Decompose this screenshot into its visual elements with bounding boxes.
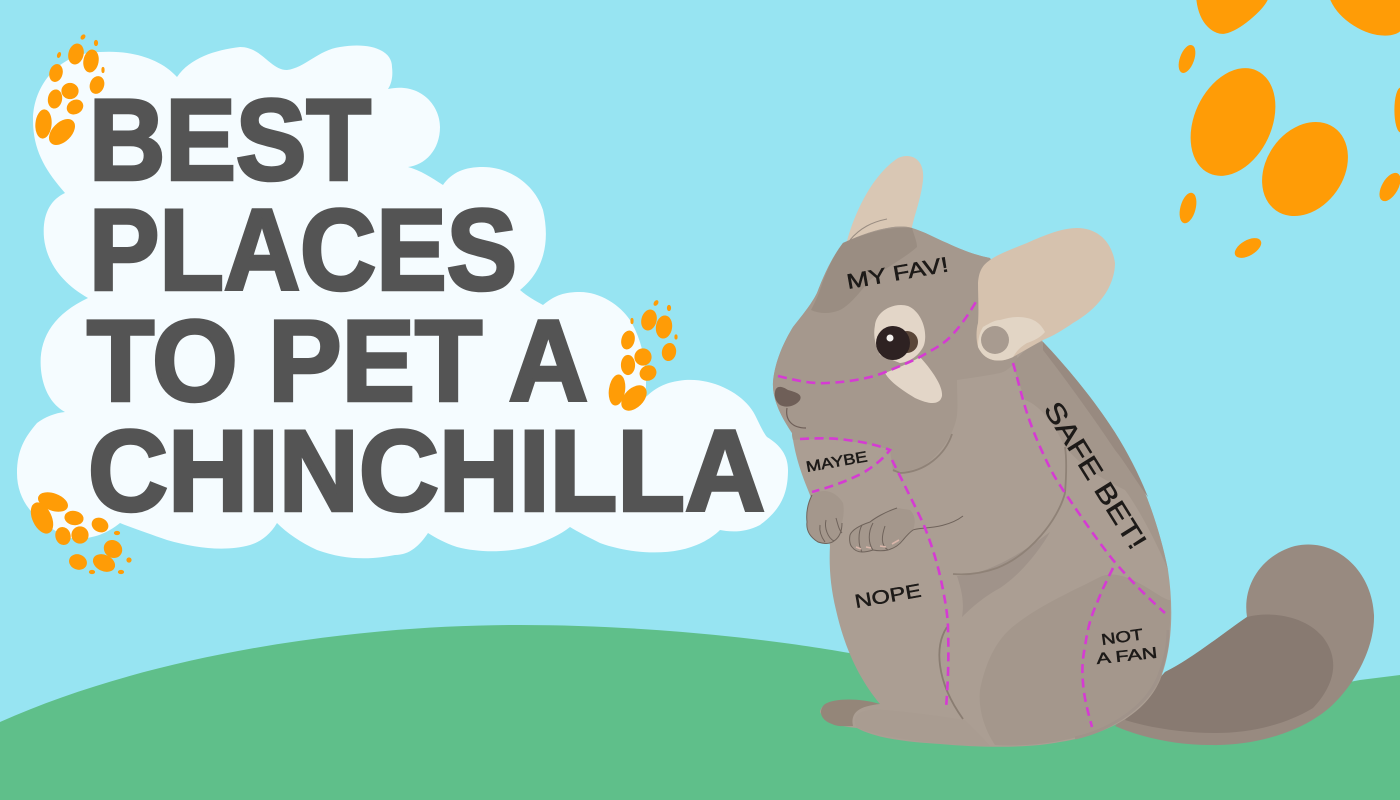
back edge rim <box>1043 342 1148 497</box>
title: TO PET A <box>87 298 588 426</box>
paw print: cloud top left <box>35 34 106 149</box>
label: NOT A FAN: NOT <box>1100 626 1145 649</box>
eye patch <box>874 305 942 403</box>
ear lines <box>850 219 887 240</box>
head shading <box>773 227 1018 472</box>
foot <box>855 710 990 746</box>
belly shadow <box>957 532 1050 617</box>
haunch shading <box>980 574 1170 745</box>
side ear <box>976 228 1115 361</box>
label: NOT A FAN: A FAN <box>1096 645 1158 668</box>
cloud behind title <box>17 46 788 558</box>
nose and mouth <box>775 387 806 428</box>
title: PLACES <box>89 186 517 314</box>
back shoulder shading <box>1013 342 1168 570</box>
label: MAYBE: MAYBE <box>805 448 869 476</box>
back ear <box>847 156 923 241</box>
paw print: cloud bottom left <box>27 489 131 574</box>
green hill <box>0 625 1400 800</box>
label: MY FAV!: MY FAV! <box>845 253 950 294</box>
paw print: large top right <box>1175 0 1400 261</box>
front paws <box>807 491 963 552</box>
dashed petting zones <box>778 300 1165 727</box>
body contour lines <box>893 434 1066 719</box>
title: CHINCHILLA <box>88 408 765 536</box>
body <box>773 227 1171 747</box>
label: SAFE BET!: SAFE BET! <box>1038 396 1152 555</box>
lower body rim <box>1075 630 1168 738</box>
tail <box>1115 545 1374 745</box>
label: NOT A FAN <box>1096 626 1158 668</box>
paw print: cloud middle right <box>607 300 677 415</box>
title: BEST <box>89 76 371 204</box>
chinchilla illustration <box>773 156 1374 747</box>
eye <box>876 326 918 360</box>
label: NOPE: NOPE <box>853 581 923 613</box>
title <box>87 76 765 536</box>
forehead dark patch <box>811 228 917 313</box>
